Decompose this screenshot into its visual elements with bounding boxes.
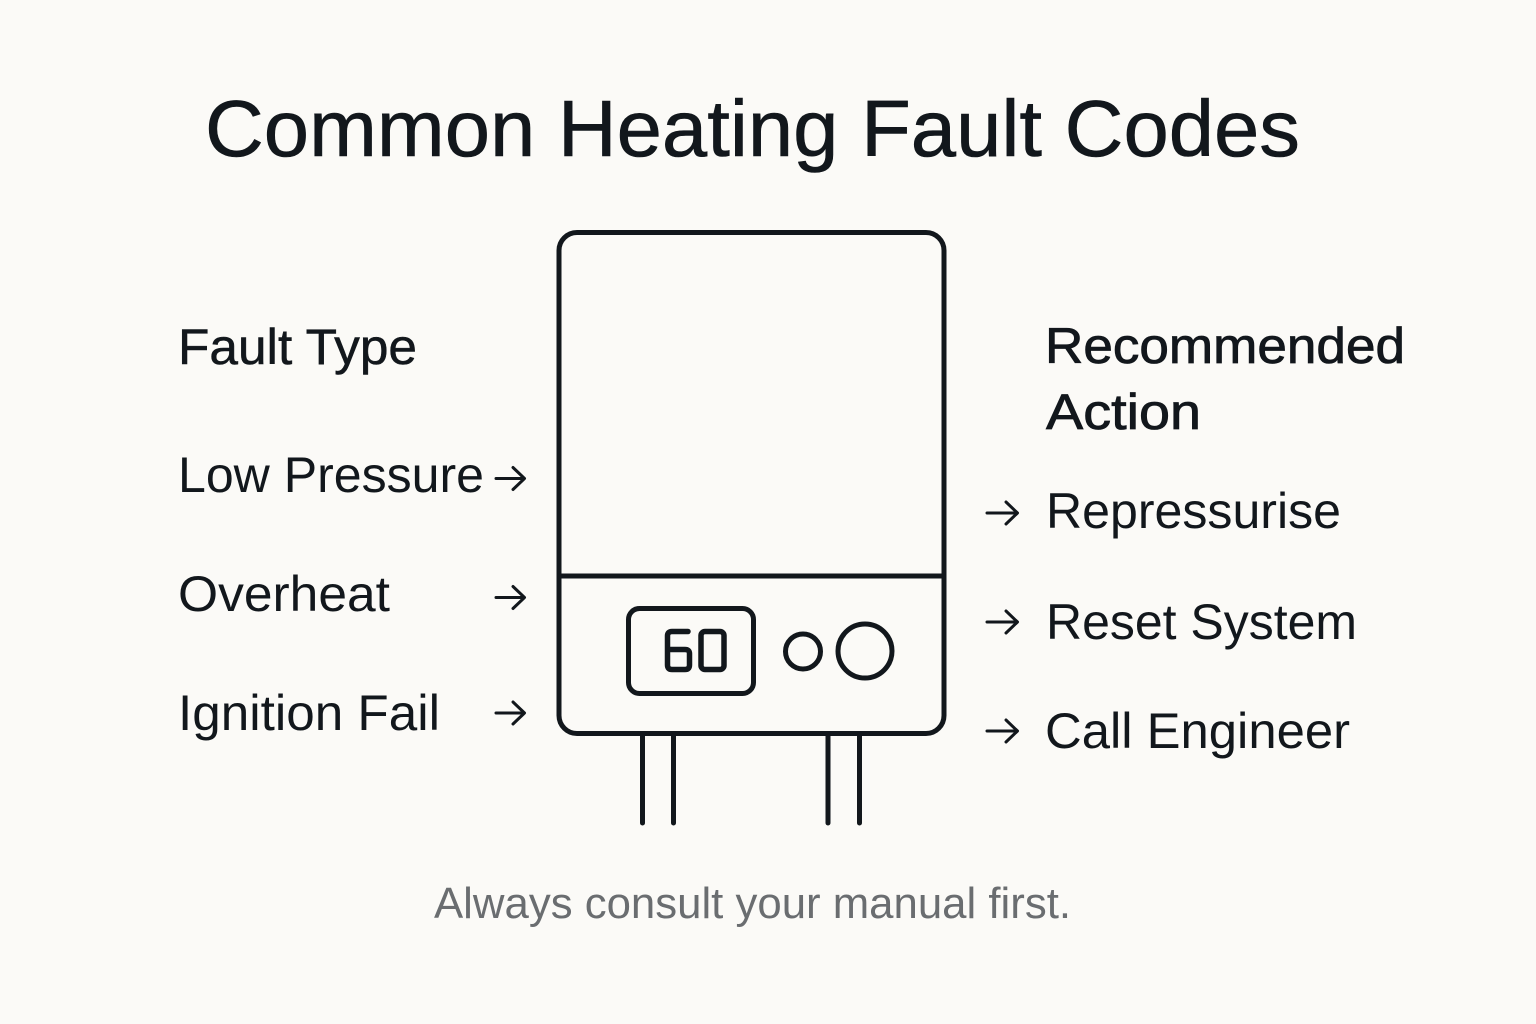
boiler body <box>559 232 944 734</box>
arrow: reset system <box>987 611 1018 633</box>
arrow: repressurise <box>987 502 1018 524</box>
label: overheat: Overheat <box>178 566 390 622</box>
heading: recommended action: Recommended <box>1045 318 1405 374</box>
arrow: overheat <box>496 586 524 608</box>
label: call engineer: Call Engineer <box>1045 703 1350 759</box>
large dial <box>838 624 892 678</box>
small dial <box>786 634 820 669</box>
footnote: Always consult your manual first. <box>434 879 1071 928</box>
label: reset system: Reset System <box>1046 594 1357 650</box>
arrow: low pressure <box>496 468 524 490</box>
heading: fault type: Fault Type <box>178 319 417 375</box>
pipes <box>642 736 860 823</box>
label: repressurise: Repressurise <box>1046 483 1341 539</box>
panel: fault types <box>178 319 524 741</box>
digital display <box>628 608 754 694</box>
title: Common Heating Fault Codes <box>205 84 1300 173</box>
panel: recommended actions <box>987 318 1405 759</box>
control panel divider <box>559 574 944 578</box>
label: ignition fail: Ignition Fail <box>178 685 440 741</box>
label: low pressure: Low Pressure <box>178 447 484 503</box>
illustration: boiler <box>559 232 944 823</box>
display reading 60 <box>668 632 724 670</box>
heading: recommended action: Action <box>1046 384 1201 440</box>
arrow: ignition fail <box>496 702 524 724</box>
heading: recommended action <box>1045 318 1405 440</box>
arrow: call engineer <box>987 720 1018 742</box>
